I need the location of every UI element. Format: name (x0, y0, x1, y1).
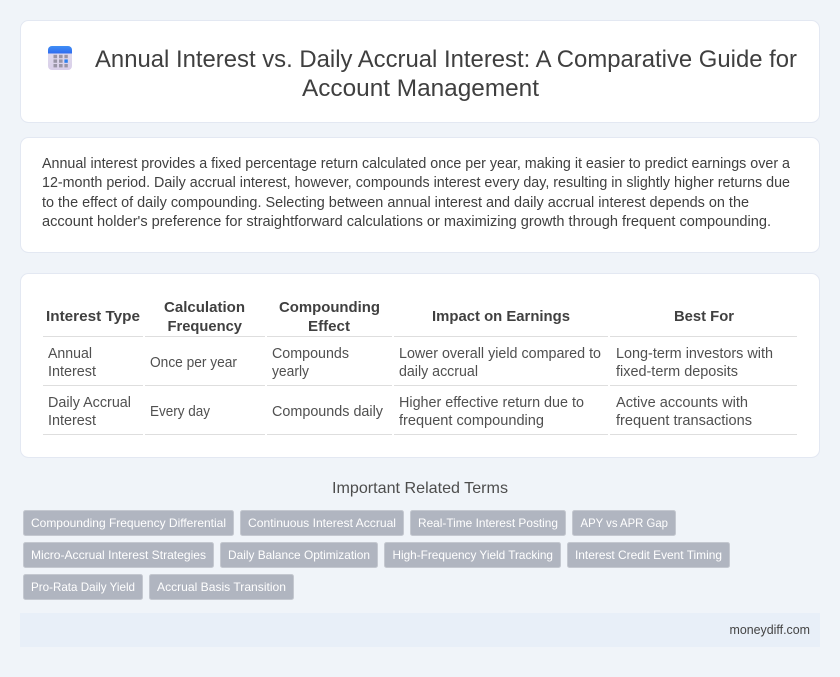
table header: Impact on Earnings (432, 309, 570, 325)
table row: annual interest: Annual (48, 346, 92, 362)
table header: Best For (674, 309, 734, 325)
table header: Compounding (279, 300, 380, 316)
table row: daily accrual interest: Active accounts with (616, 395, 748, 411)
table row: annual interest: Interest (48, 364, 96, 380)
table row: daily accrual interest: Daily Accrual (48, 395, 131, 411)
table header (46, 300, 734, 335)
tag list: related terms: Daily Balance Optimization (228, 548, 370, 562)
table row: daily accrual interest (48, 395, 752, 429)
table header: Effect (308, 319, 350, 335)
text block: introduction: to the effect of daily compounding. Selecting between annual interest and daily accrual interest depends on the (42, 195, 749, 211)
icon: calendar (48, 46, 72, 70)
tag list: related terms: High-Frequency Yield Tracking (392, 548, 553, 562)
tag list: related terms: Real-Time Interest Posting (418, 516, 558, 530)
text block: introduction: Annual interest provides a fixed percentage return calculated once per year, making it easier to predict earnings over a (42, 156, 790, 172)
table header: Interest Type (46, 309, 140, 325)
table header: Frequency (168, 319, 243, 335)
tag list: related terms (24, 510, 730, 600)
title (95, 46, 797, 102)
table row: daily accrual interest: Every day (150, 404, 211, 420)
tag list: related terms: APY vs APR Gap (580, 516, 668, 530)
tag list: related terms: Continuous Interest Accrual (248, 516, 396, 530)
text block: introduction: account holder's preference for straightforward calculations or maximizing growth through frequent compounding. (42, 214, 771, 230)
table row: daily accrual interest: Interest (48, 413, 96, 429)
table row: annual interest: Lower overall yield compared to (399, 346, 601, 362)
tag list: related terms: Interest Credit Event Timing (575, 548, 722, 562)
table row: annual interest: yearly (272, 364, 310, 380)
title: Annual Interest vs. Daily Accrual Interest: A Comparative Guide for (95, 46, 797, 73)
footer: moneydiff.com (730, 622, 810, 637)
table row: daily accrual interest: frequent compounding (399, 413, 544, 429)
title: Account Management (302, 75, 539, 102)
panel: introduction (20, 138, 820, 252)
table row: daily accrual interest: Compounds daily (272, 404, 384, 420)
tag list: related terms: Pro-Rata Daily Yield (31, 580, 135, 594)
tag list: related terms: Compounding Frequency Differential (31, 516, 226, 530)
table row: annual interest: Long-term investors with (616, 346, 773, 362)
table row: daily accrual interest: Higher effective return due to (399, 395, 584, 411)
table row: daily accrual interest: frequent transactions (616, 413, 752, 429)
table row: annual interest (48, 346, 773, 380)
tag list: related terms: Micro-Accrual Interest Strategies (31, 548, 206, 562)
table row: annual interest: daily accrual (399, 364, 478, 380)
heading: important related terms: Important Related Terms (332, 480, 508, 497)
footer (20, 613, 820, 647)
panel: header (20, 20, 820, 122)
text block: introduction (42, 156, 790, 230)
table header: Calculation (164, 300, 245, 316)
text block: introduction: 12-month period. Daily accrual interest, however, compounds interest every day, resulting in slightly higher returns due (42, 175, 790, 191)
table row: annual interest: Once per year (150, 355, 237, 371)
tag list: related terms: Accrual Basis Transition (157, 580, 286, 594)
table row: annual interest: fixed-term deposits (616, 364, 738, 380)
panel: comparison table (20, 274, 820, 458)
table row: annual interest: Compounds (272, 346, 349, 362)
